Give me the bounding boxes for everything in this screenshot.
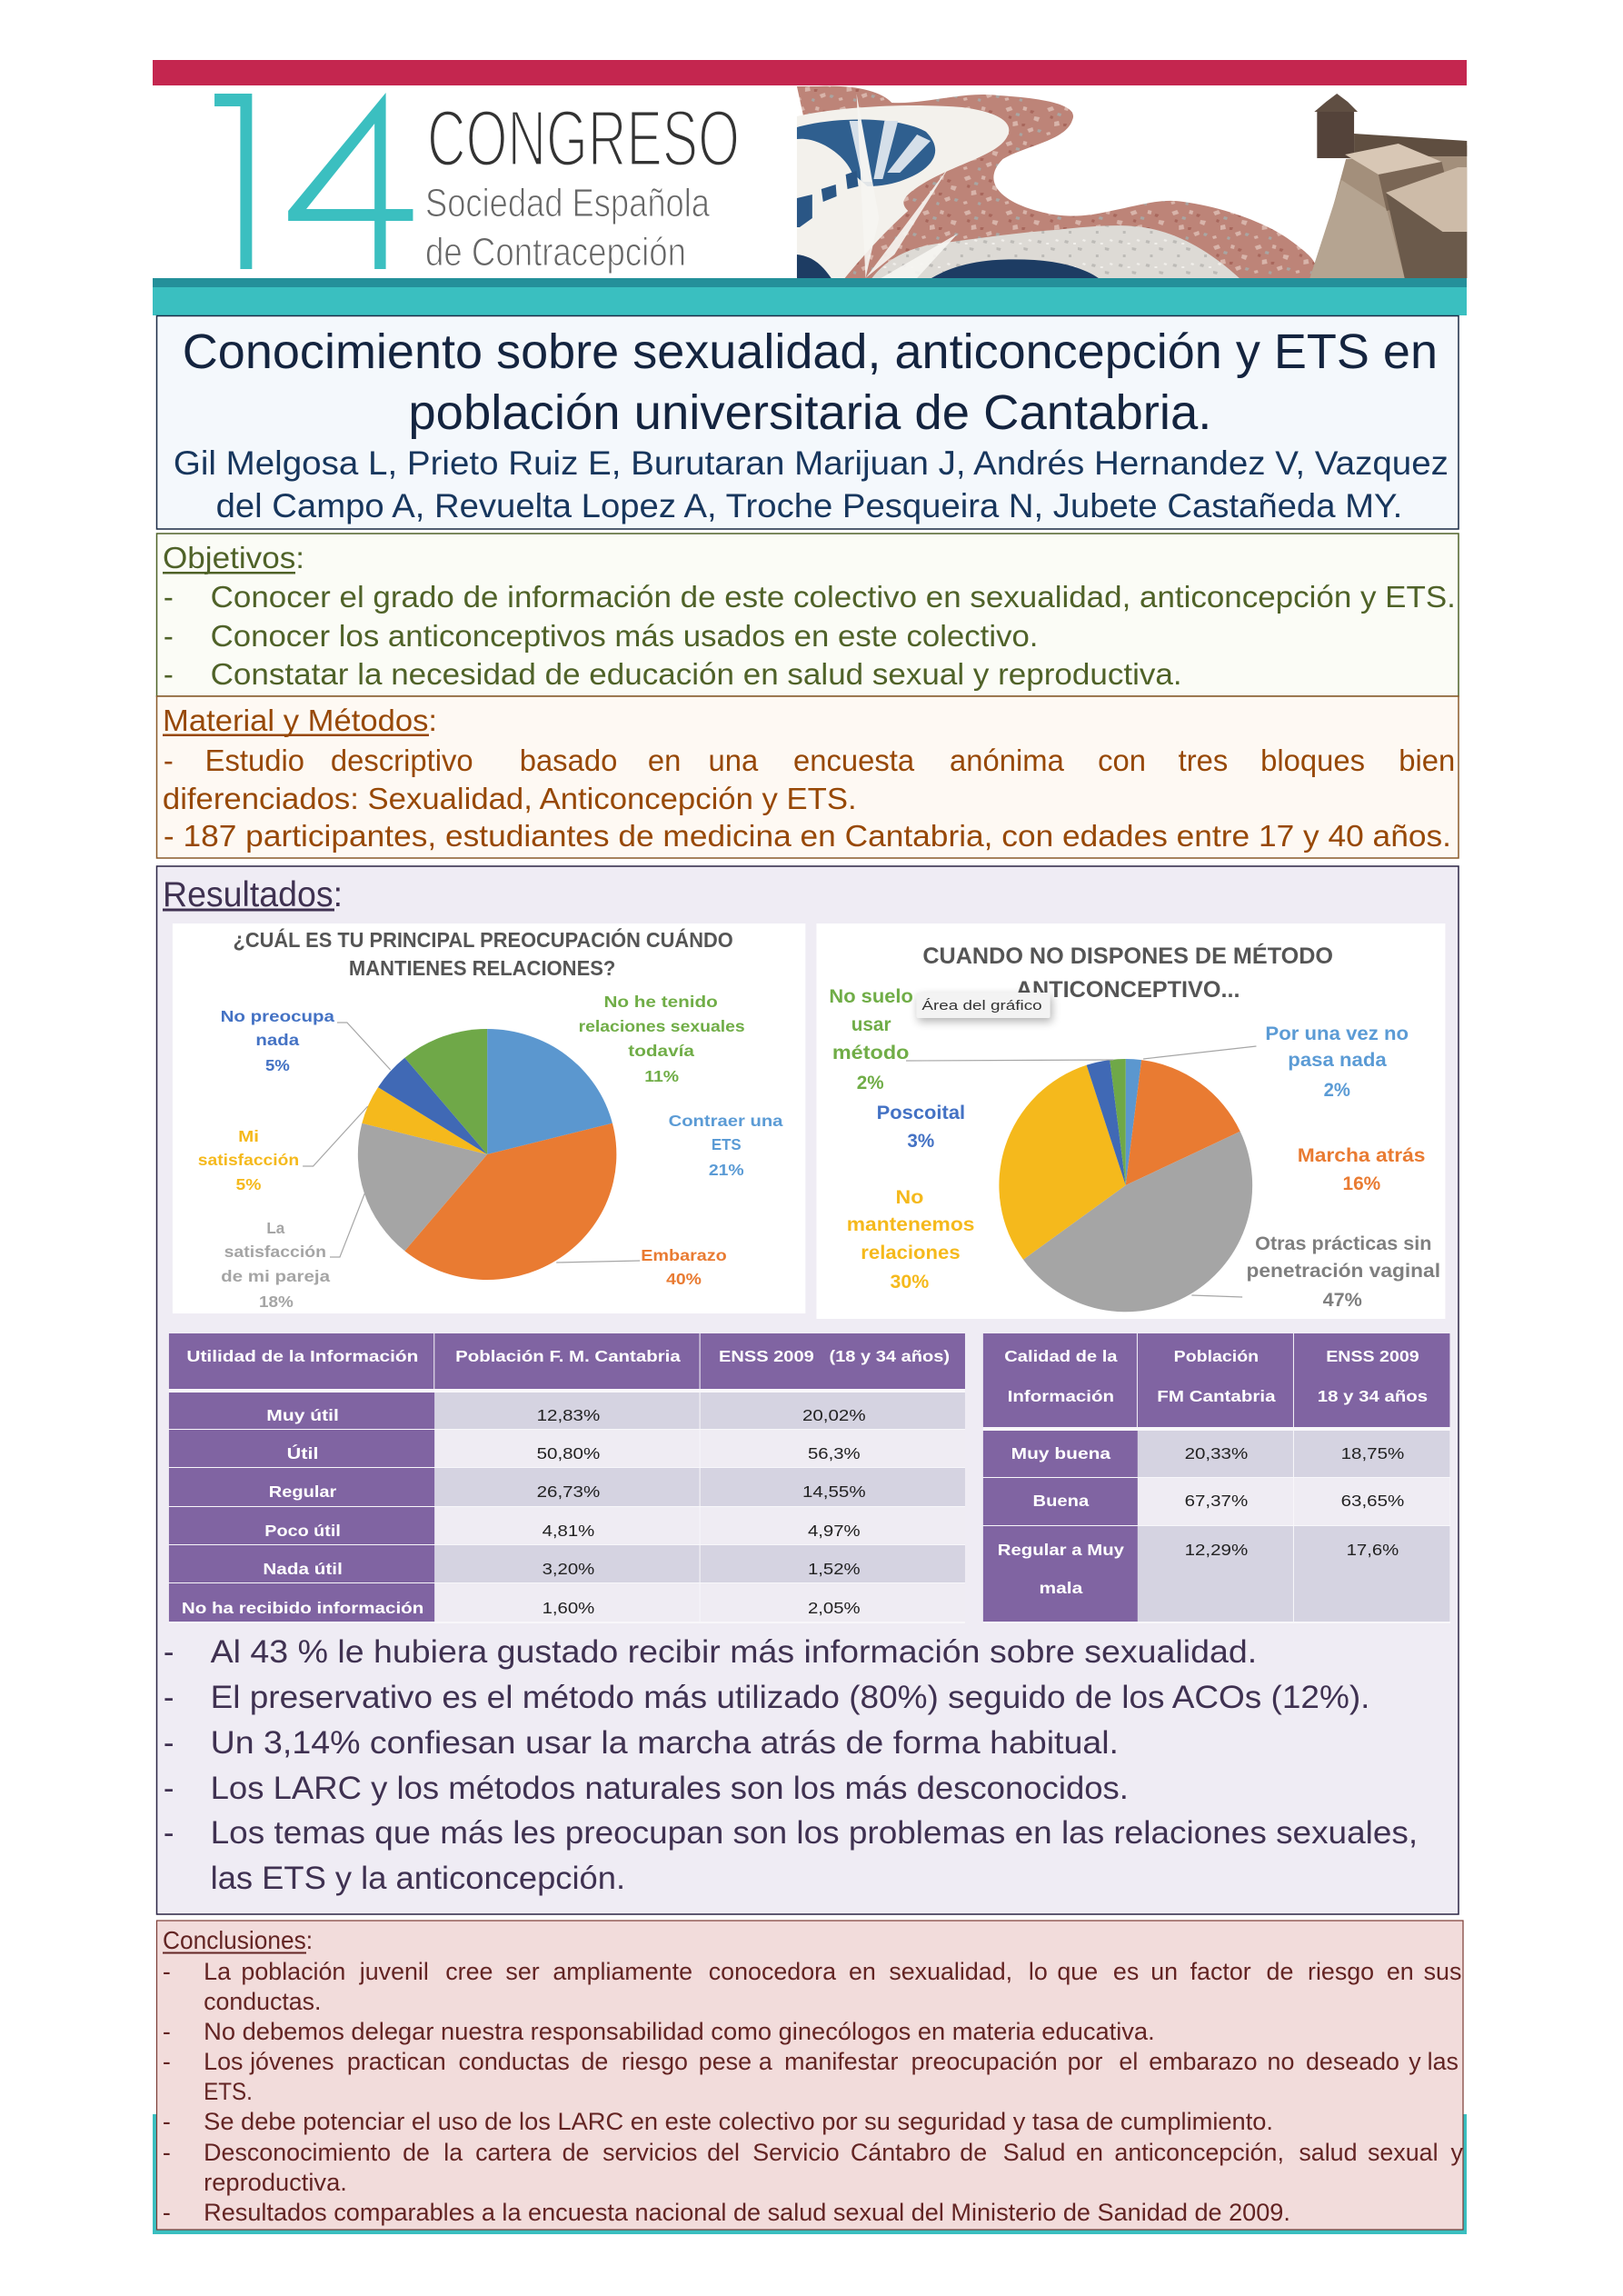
chart title: ¿CUÁL ES TU PRINCIPAL PREOCUPACIÓN CUÁNDO — [234, 928, 733, 952]
table row labels: mala — [1040, 1579, 1083, 1597]
material text: en — [648, 744, 681, 777]
conclusiones list: de — [1267, 1958, 1293, 1985]
table row labels: Muy útil — [266, 1406, 339, 1424]
conclusiones list: sus — [1424, 1958, 1461, 1985]
conclusiones list: sexualidad, — [889, 1958, 1012, 1985]
table header: Utilidad de la Información — [186, 1347, 418, 1365]
conclusiones list: es — [1113, 1958, 1139, 1985]
objetivos list: - — [164, 619, 174, 653]
conclusiones list: - — [163, 2108, 171, 2135]
chart title: ANTICONCEPTIVO... — [1016, 977, 1240, 1003]
resultados bullet list: - — [164, 1680, 174, 1715]
dark teal band — [153, 278, 1467, 287]
pie chart: sin método anticonceptivo — [816, 923, 1445, 1319]
conclusiones list: el — [1119, 2048, 1138, 2075]
panel: title — [156, 316, 1459, 529]
table values: 12,29% — [1185, 1541, 1248, 1559]
conclusiones list: las — [1428, 2048, 1459, 2075]
label: poscoital: Poscoital — [877, 1103, 965, 1123]
label: no suelo usar método: 2% — [857, 1073, 884, 1093]
resultados bullet list: - — [164, 1725, 174, 1761]
conclusiones list: de — [403, 2139, 430, 2166]
label: no suelo usar método: método — [832, 1043, 909, 1063]
chart title — [234, 928, 733, 980]
resultados bullet list: Los temas que más les preocupan son los problemas en las relaciones sexuales, — [211, 1815, 1418, 1851]
conclusiones list: ETS. — [204, 2078, 253, 2105]
conclusiones list: Cántabro — [851, 2139, 951, 2166]
label: contraer una ETS: Contraer una — [669, 1112, 784, 1130]
label: poscoital — [877, 1103, 965, 1152]
conclusiones list: cartera — [475, 2139, 552, 2166]
conclusiones list: - — [163, 1958, 171, 1985]
objetivos list: - — [164, 580, 174, 614]
table row labels: No ha recibido información — [182, 1599, 423, 1617]
logo subtitle line 2: de Contracepción — [425, 230, 686, 275]
material text: descriptivo — [331, 744, 473, 777]
label: poscoital: 3% — [907, 1131, 935, 1152]
label: no he tenido relaciones — [579, 993, 745, 1085]
label: otras prácticas: penetración vaginal — [1247, 1261, 1440, 1282]
label: contraer una ETS: 21% — [709, 1161, 744, 1179]
table header: Población F. M. Cantabria — [455, 1347, 682, 1365]
table row labels: Útil — [287, 1443, 318, 1462]
table row labels: Regular — [269, 1482, 336, 1501]
table row labels — [998, 1444, 1124, 1597]
table values: 14,55% — [802, 1482, 866, 1501]
authors: del Campo A, Revuelta Lopez A, Troche Pesqueira N, Jubete Castañeda MY. — [216, 487, 1402, 524]
table values: 20,33% — [1185, 1444, 1248, 1462]
conclusiones list: conductas — [458, 2048, 570, 2075]
table header: ENSS 2009 (18 y 34 años) — [719, 1347, 950, 1365]
table values: 4,81% — [543, 1522, 594, 1540]
label: no preocupa nada — [221, 1007, 335, 1074]
header artwork: abstract shapes — [797, 86, 1317, 278]
label: la satisfacción de mi pareja: de mi pareja — [221, 1267, 331, 1285]
conclusiones list: población — [241, 1958, 345, 1985]
label: la satisfacción de mi pareja: La — [266, 1219, 285, 1237]
label: no preocupa nada: nada — [255, 1031, 300, 1049]
table header: Calidad de la — [1004, 1347, 1119, 1365]
objetivos list: Conocer el grado de información de este colectivo en sexualidad, anticoncepción y ETS. — [211, 580, 1456, 614]
main title: Conocimiento sobre sexualidad, anticoncepción y ETS en — [183, 324, 1438, 379]
conclusiones list: - — [163, 2139, 171, 2166]
main title: población universitaria de Cantabria. — [408, 385, 1211, 440]
chart title: MANTIENES RELACIONES? — [349, 956, 615, 980]
conclusiones list: Se debe potenciar el uso de los LARC en este colectivo por su seguridad y tasa de cumplimiento. — [204, 2108, 1273, 2135]
label: mi satisfacción — [198, 1127, 299, 1193]
label: por una vez no pasa nada: 2% — [1324, 1080, 1350, 1101]
table header: Población — [1174, 1347, 1259, 1365]
resultados bullet list: las ETS y la anticoncepción. — [211, 1861, 625, 1896]
conclusiones list: Desconocimiento — [204, 2139, 391, 2166]
material text: basado — [520, 744, 617, 777]
panel: objetivos — [156, 534, 1459, 696]
material text: con — [1098, 744, 1146, 777]
table row labels: Regular a Muy — [998, 1541, 1124, 1559]
resultados bullet list — [164, 1634, 1418, 1896]
conclusiones list: y — [1450, 2139, 1463, 2166]
table values — [1185, 1444, 1404, 1559]
label: mi satisfacción: Mi — [238, 1127, 259, 1145]
conclusiones list: - — [163, 2048, 171, 2075]
tooltip: área del gráfico — [916, 993, 1052, 1022]
resultados heading: Resultados: — [163, 875, 343, 914]
table values — [537, 1406, 866, 1617]
label: mi satisfacción: 5% — [236, 1175, 261, 1193]
label: no mantenemos relaciones: relaciones — [861, 1243, 961, 1263]
conclusiones list: en — [1076, 2139, 1103, 2166]
table row labels: Nada útil — [263, 1560, 343, 1578]
resultados bullet list: Los LARC y los métodos naturales son los más desconocidos. — [211, 1771, 1129, 1806]
conclusiones list: ampliamente — [553, 1958, 692, 1985]
table values: 18,75% — [1341, 1444, 1404, 1462]
conclusiones list: en — [1387, 1958, 1414, 1985]
label: marcha atrás: Marcha atrás — [1298, 1145, 1426, 1166]
material heading: Material y Métodos: — [163, 704, 437, 737]
table: calidad de la información — [983, 1333, 1450, 1623]
objetivos list: Conocer los anticonceptivos más usados en este colectivo. — [211, 619, 1038, 653]
resultados bullet list: - — [164, 1815, 174, 1851]
logo word CONGRESO: CONGRESO — [427, 95, 740, 183]
material text: bien — [1399, 744, 1455, 777]
table row labels: Muy buena — [1011, 1444, 1111, 1462]
label: marcha atrás: 16% — [1342, 1173, 1381, 1194]
label: no preocupa nada: 5% — [265, 1056, 290, 1074]
label: la satisfacción de mi pareja — [221, 1219, 331, 1311]
label: embarazo: 40% — [666, 1270, 702, 1288]
conclusiones list: Los — [204, 2048, 243, 2075]
material text: encuesta — [793, 744, 915, 777]
conclusiones list: conocedora — [709, 1958, 836, 1985]
conclusiones list: reproductiva. — [204, 2169, 347, 2196]
conclusiones list: - — [163, 2199, 171, 2226]
conclusiones list: un — [1150, 1958, 1178, 1985]
panel: resultados — [156, 866, 1459, 1914]
table row cells — [169, 1393, 965, 1622]
conclusiones list: riesgo — [622, 2048, 688, 2075]
material text — [163, 744, 1455, 853]
label: no preocupa nada: No preocupa — [221, 1007, 335, 1025]
tooltip: área del gráfico: Área del gráfico — [921, 998, 1042, 1013]
conclusiones list: de — [563, 2139, 589, 2166]
conclusiones list: Resultados comparables a la encuesta nacional de salud sexual del Ministerio de Sanidad de 2009. — [204, 2199, 1290, 2226]
conclusiones list: ser — [505, 1958, 540, 1985]
material text: - 187 participantes, estudiantes de medicina en Cantabria, con edades entre 17 y 40 años. — [164, 819, 1451, 853]
table values: 1,60% — [543, 1599, 594, 1617]
label: por una vez no pasa nada — [1265, 1023, 1409, 1101]
material text: anónima — [950, 744, 1065, 777]
resultados bullet list: El preservativo es el método más utilizado (80%) seguido de los ACOs (12%). — [211, 1680, 1369, 1715]
table header: ENSS 2009 — [1326, 1347, 1419, 1365]
conclusiones list: que — [1057, 1958, 1098, 1985]
conclusiones list: conductas. — [204, 1988, 321, 2015]
conclusiones list: servicios — [602, 2139, 697, 2166]
label: por una vez no pasa nada: pasa nada — [1288, 1050, 1387, 1071]
material text: bloques — [1260, 744, 1365, 777]
conclusiones list: embarazo — [1149, 2048, 1258, 2075]
resultados bullet list: Un 3,14% confiesan usar la marcha atrás de forma habitual. — [211, 1725, 1119, 1761]
label: por una vez no pasa nada: Por una vez no — [1265, 1023, 1409, 1044]
table values: 4,97% — [808, 1522, 861, 1540]
conclusiones list: Servicio — [752, 2139, 840, 2166]
label: no mantenemos relaciones: 30% — [891, 1272, 930, 1293]
conclusiones list: del — [707, 2139, 740, 2166]
label: no suelo usar método — [829, 986, 913, 1093]
conclusiones list: preocupación — [911, 2048, 1058, 2075]
label: no he tenido relaciones: todavía — [628, 1042, 695, 1060]
table header: FM Cantabria — [1157, 1387, 1277, 1405]
table values: 63,65% — [1341, 1492, 1404, 1510]
table header — [983, 1333, 1449, 1427]
table row labels: Buena — [1033, 1492, 1090, 1510]
conclusiones list: cree — [445, 1958, 493, 1985]
table values: 67,37% — [1185, 1492, 1248, 1510]
table values: 17,6% — [1347, 1541, 1399, 1559]
table: utilidad de la información — [169, 1333, 965, 1623]
label: otras prácticas: Otras prácticas sin — [1255, 1233, 1431, 1254]
logo subtitle line 1: Sociedad Española — [425, 181, 710, 225]
label: la satisfacción de mi pareja: 18% — [259, 1293, 294, 1311]
table values: 1,52% — [808, 1560, 861, 1578]
chart title — [922, 943, 1333, 1003]
conclusiones list: no — [1268, 2048, 1294, 2075]
main title — [183, 324, 1438, 440]
conclusiones list: en — [849, 1958, 876, 1985]
table values: 3,20% — [543, 1560, 594, 1578]
label: no mantenemos relaciones: No — [896, 1187, 923, 1208]
resultados bullet list: Al 43 % le hubiera gustado recibir más información sobre sexualidad. — [211, 1634, 1257, 1670]
material text: tres — [1179, 744, 1228, 777]
table row cells — [983, 1431, 1449, 1622]
conclusiones list: juvenil — [359, 1958, 429, 1985]
logo number 14 — [214, 93, 413, 269]
conclusiones list: de — [960, 2139, 987, 2166]
resultados bullet list: - — [164, 1634, 174, 1670]
header artwork: castle — [1309, 94, 1467, 278]
objetivos list: Constatar la necesidad de educación en salud sexual y reproductiva. — [211, 657, 1182, 691]
material text: - — [164, 744, 174, 777]
conclusiones list: La — [204, 1958, 231, 1985]
conclusiones list: lo — [1029, 1958, 1048, 1985]
conclusiones list: pese — [699, 2048, 752, 2075]
conclusiones list: y — [1409, 2048, 1421, 2075]
conclusiones list: a — [759, 2048, 772, 2075]
pie chart: principal preocupación — [173, 923, 805, 1313]
authors — [174, 444, 1449, 524]
objetivos list: - — [164, 657, 174, 691]
label: no mantenemos relaciones — [847, 1187, 974, 1293]
teal band — [153, 287, 1467, 315]
material text: una — [709, 744, 759, 777]
objetivos list — [164, 580, 1456, 691]
objetivos heading: Objetivos: — [163, 541, 304, 574]
conclusiones heading: Conclusiones: — [163, 1926, 313, 1954]
table header — [169, 1333, 965, 1389]
label: no he tenido relaciones: 11% — [644, 1067, 679, 1085]
label: marcha atrás — [1298, 1145, 1426, 1194]
conclusiones list: riesgo — [1308, 1958, 1374, 1985]
label: otras prácticas — [1247, 1233, 1440, 1311]
label: no he tenido relaciones: No he tenido — [603, 993, 718, 1011]
bottom teal frame — [153, 2114, 1467, 2234]
panel: material y métodos — [156, 696, 1459, 858]
conclusiones list: anticoncepción, — [1114, 2139, 1284, 2166]
conclusiones list: jóvenes — [249, 2048, 334, 2075]
conclusiones list: por — [1068, 2048, 1103, 2075]
label: otras prácticas: 47% — [1323, 1290, 1362, 1311]
pie slices — [999, 1059, 1252, 1312]
conclusiones list: de — [581, 2048, 608, 2075]
conclusiones list — [163, 1958, 1463, 2226]
conclusiones list: practican — [347, 2048, 446, 2075]
conclusiones list: Salud — [1003, 2139, 1065, 2166]
label: no suelo usar método: No suelo — [829, 986, 913, 1007]
table header: 18 y 34 años — [1318, 1387, 1428, 1405]
table values: 20,02% — [802, 1406, 866, 1424]
table values: 2,05% — [808, 1599, 861, 1617]
table header: Información — [1008, 1387, 1114, 1405]
resultados bullet list: - — [164, 1771, 174, 1806]
header banner — [153, 60, 1467, 315]
label: no mantenemos relaciones: mantenemos — [847, 1214, 974, 1235]
material text: Estudio — [205, 744, 304, 777]
table row labels: Poco útil — [264, 1522, 341, 1540]
conclusiones list: deseado — [1306, 2048, 1399, 2075]
leader lines — [906, 1046, 1256, 1297]
material text: diferenciados: Sexualidad, Anticoncepción y ETS. — [163, 782, 857, 815]
leader lines — [303, 1023, 640, 1263]
label: contraer una ETS — [669, 1112, 784, 1179]
pie slices — [358, 1029, 616, 1280]
conclusiones list: manifestar — [784, 2048, 898, 2075]
conclusiones list: factor — [1190, 1958, 1251, 1985]
table values: 26,73% — [537, 1482, 600, 1501]
chart title: CUANDO NO DISPONES DE MÉTODO — [922, 943, 1333, 969]
label: no suelo usar método: usar — [851, 1014, 891, 1035]
label: contraer una ETS: ETS — [712, 1135, 742, 1153]
table values: 12,83% — [537, 1406, 600, 1424]
authors: Gil Melgosa L, Prieto Ruiz E, Burutaran Marijuan J, Andrés Hernandez V, Vazquez — [174, 444, 1449, 482]
label: la satisfacción de mi pareja: satisfacción — [224, 1243, 326, 1261]
conclusiones list: No debemos delegar nuestra responsabilidad como ginecólogos en materia educativa. — [204, 2018, 1155, 2045]
label: embarazo — [641, 1246, 727, 1288]
table values: 56,3% — [808, 1444, 861, 1462]
label: embarazo: Embarazo — [641, 1246, 727, 1264]
top red bar — [153, 60, 1467, 85]
conclusiones list: la — [443, 2139, 463, 2166]
label: no he tenido relaciones: relaciones sexuales — [579, 1017, 745, 1035]
panel: conclusiones — [156, 1921, 1463, 2230]
table values: 50,80% — [537, 1444, 600, 1462]
conclusiones list: - — [163, 2018, 171, 2045]
table row labels — [182, 1406, 423, 1617]
conclusiones list: salud — [1299, 2139, 1358, 2166]
label: mi satisfacción: satisfacción — [198, 1151, 299, 1169]
conclusiones list: sexual — [1368, 2139, 1439, 2166]
